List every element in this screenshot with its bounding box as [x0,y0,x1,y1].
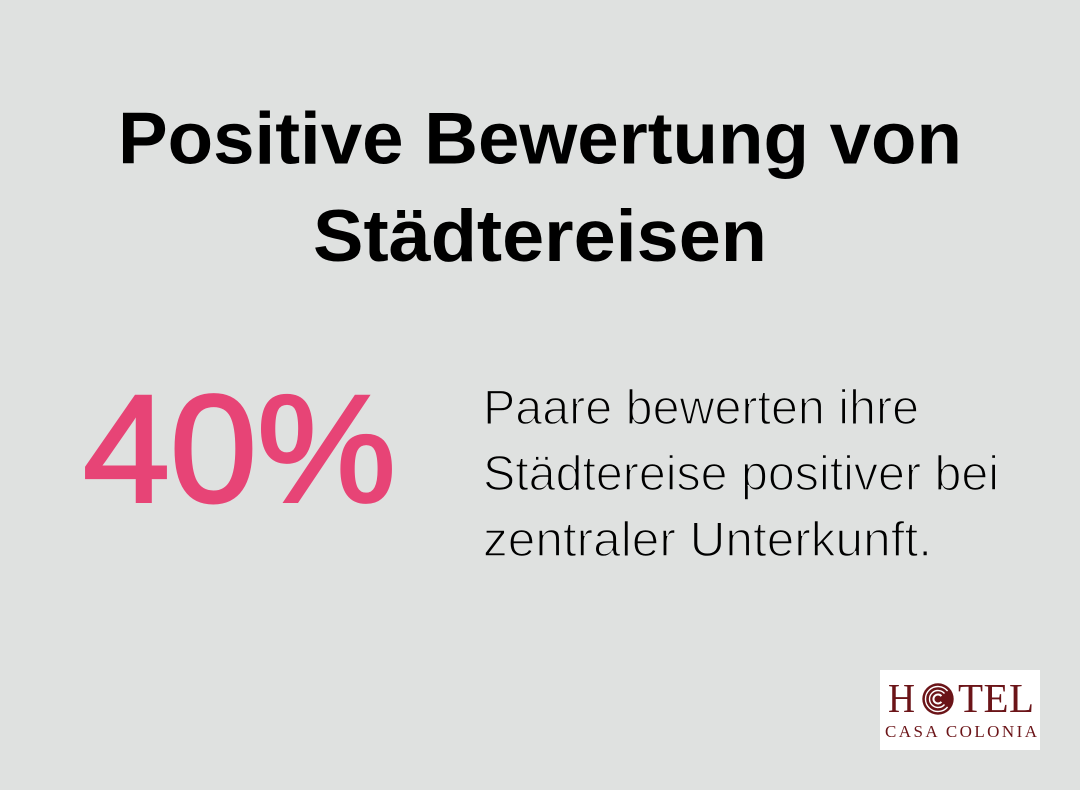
description text: zentraler Unterkunft. [483,513,932,567]
logo wordmark: hotel: H [888,675,915,721]
logo wordmark: hotel [888,675,1034,721]
description text [483,381,999,567]
title [118,98,962,277]
logo wordmark: casa colonia: CASA COLONIA [885,722,1038,741]
big statistic: 40%: 40% [83,364,396,534]
title: Städtereisen [313,196,767,277]
description text: Paare bewerten ihre [483,381,919,435]
logo wordmark: hotel: TEL [958,675,1034,721]
title: Positive Bewertung von [118,98,962,180]
logo: Hotel Casa Colonia [880,670,1040,750]
description text: Städtereise positiver bei [483,447,999,501]
logo icon: spiral circle [922,683,954,715]
